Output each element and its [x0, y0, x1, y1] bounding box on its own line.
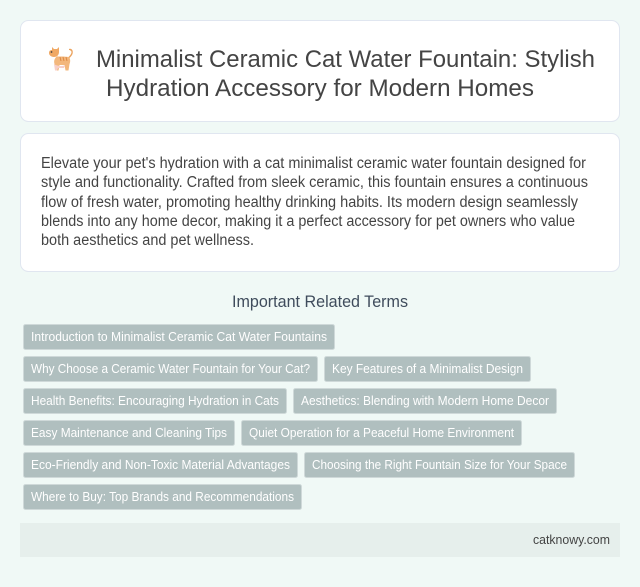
description text: both aesthetics and pet wellness.: [41, 232, 254, 249]
footer: catknowy.com: [533, 532, 610, 547]
description text: style and functionality. Crafted from sleek ceramic, this fountain ensures a continuous: [41, 174, 588, 191]
title: [96, 46, 595, 102]
tag 6: [24, 420, 234, 446]
tag 4: Health Benefits: Encouraging Hydration in Cats: [31, 393, 279, 408]
footer: [20, 523, 620, 557]
tag 8: Eco-Friendly and Non-Toxic Material Advantages: [31, 457, 290, 472]
icon: cat: [49, 47, 73, 70]
tag 10: Where to Buy: Top Brands and Recommendations: [31, 489, 294, 504]
tag list: [24, 324, 574, 510]
description text: [41, 155, 588, 249]
tag 2: [24, 356, 318, 382]
panel: description card: [20, 134, 620, 272]
description text: blends into any home decor, making it a perfect accessory for pet owners who value: [41, 213, 575, 230]
tag 1: Introduction to Minimalist Ceramic Cat Water Fountains: [31, 329, 327, 344]
title: Hydration Accessory for Modern Homes: [106, 75, 534, 102]
tag 9: Choosing the Right Fountain Size for Your Space: [312, 457, 567, 472]
tag 7: [242, 420, 522, 446]
tag 3: [324, 356, 530, 382]
tag 6: Easy Maintenance and Cleaning Tips: [31, 425, 227, 440]
tag 10: [24, 484, 302, 510]
tag 1: [24, 324, 334, 350]
tag 5: [294, 388, 556, 414]
tag 8: [24, 452, 298, 478]
tag 5: Aesthetics: Blending with Modern Home Decor: [301, 393, 550, 408]
tag 9: [304, 452, 574, 478]
title: Minimalist Ceramic Cat Water Fountain: Stylish: [96, 46, 595, 73]
tag 7: Quiet Operation for a Peaceful Home Environment: [249, 425, 514, 440]
tag 2: Why Choose a Ceramic Water Fountain for Your Cat?: [31, 361, 310, 376]
heading: related terms: Important Related Terms: [232, 293, 408, 311]
tag 4: [24, 388, 286, 414]
description text: Elevate your pet's hydration with a cat minimalist ceramic water fountain designed for: [41, 155, 586, 172]
panel: title card: [20, 20, 620, 122]
tag 3: Key Features of a Minimalist Design: [332, 361, 523, 376]
description text: flow of fresh water, promoting healthy drinking habits. Its modern design seamlessly: [41, 194, 578, 211]
